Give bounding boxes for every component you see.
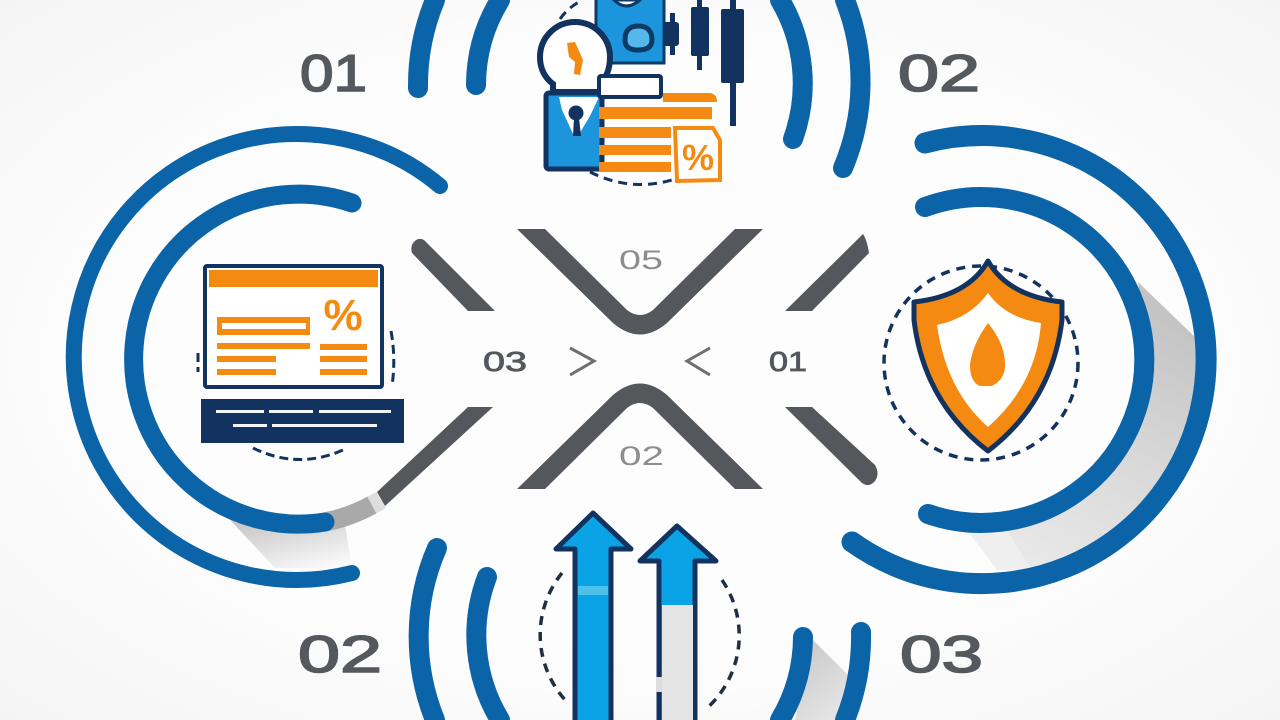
chevron left — [687, 348, 710, 375]
text lines — [217, 317, 367, 375]
icon: growth arrows — [540, 513, 739, 720]
shield body — [914, 261, 1062, 451]
panel: right ring — [852, 136, 1206, 584]
dashed circle — [884, 266, 1078, 460]
bottom inner arc — [476, 577, 803, 720]
upper chevron — [517, 229, 763, 334]
flame drop — [970, 323, 1005, 386]
centre number 03: 03 — [483, 346, 527, 377]
panel: left ring — [74, 134, 440, 580]
dashed circle — [560, 2, 672, 184]
tall arrow — [556, 513, 631, 720]
central X shape — [377, 229, 878, 506]
padlock — [546, 93, 602, 169]
header bar — [209, 270, 378, 287]
candlesticks — [663, 0, 744, 126]
percent box: % — [682, 137, 714, 178]
short arrow — [640, 526, 716, 720]
centre number 02: 02 — [619, 441, 664, 471]
dashed circle — [540, 573, 739, 709]
screen — [205, 266, 382, 387]
top-left diagonal — [411, 239, 495, 311]
right inner arc — [925, 197, 1144, 523]
light bulb — [540, 22, 610, 92]
dashed circle — [198, 331, 394, 460]
lower chevron — [517, 384, 763, 489]
arc shadows — [230, 282, 1197, 720]
corner number 02 top: 02 — [898, 45, 980, 103]
chevron right — [570, 348, 594, 375]
keyboard — [201, 399, 404, 443]
right outer arc — [852, 136, 1206, 584]
shield inner — [937, 293, 1041, 427]
corner number 03: 03 — [900, 626, 983, 684]
panel: top ring — [418, 0, 861, 168]
corner number 02 bottom: 02 — [298, 626, 382, 684]
bottom-left diagonal — [377, 407, 493, 506]
icon: shield — [884, 261, 1078, 460]
blue tag — [596, 0, 664, 63]
top outer arc — [418, 0, 861, 168]
centre number 05: 05 — [619, 245, 663, 275]
left ring grey extension — [325, 500, 381, 522]
centre number 01: 01 — [769, 346, 807, 377]
top inner arc — [476, 0, 803, 139]
top-right diagonal — [785, 234, 869, 311]
corner number 01: 01 — [300, 45, 367, 103]
panel: bottom ring — [419, 548, 861, 720]
small card — [599, 76, 661, 97]
coin stack — [599, 93, 717, 172]
percent box — [675, 128, 720, 181]
icon: laptop — [198, 266, 404, 460]
percent sign: % — [323, 291, 363, 340]
left outer arc — [74, 134, 440, 580]
bottom outer arc — [419, 548, 861, 720]
left inner arc — [134, 194, 352, 524]
icon: finance cluster — [540, 0, 744, 184]
bottom-right diagonal — [785, 407, 878, 485]
